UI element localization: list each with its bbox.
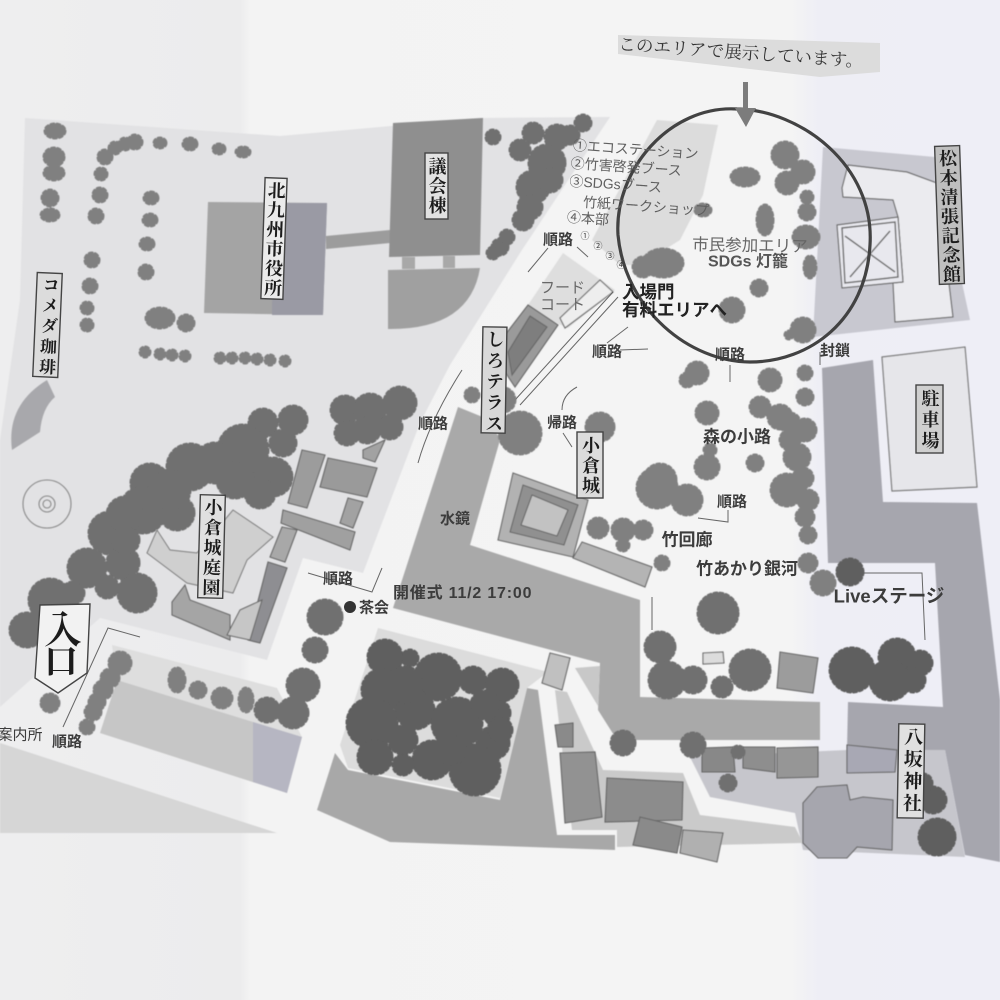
map text labels: SDGs 灯籠 [708, 252, 788, 270]
map text labels: 順路 [323, 570, 353, 588]
central trees [465, 362, 835, 595]
shrine dark ground [847, 702, 950, 750]
booth list: 竹紙ワークショップ [583, 194, 709, 219]
assembly side trees [486, 115, 591, 259]
map text labels: 有料エリアへ [622, 300, 727, 320]
buildings [172, 280, 897, 862]
garden forest [10, 387, 416, 647]
ground right of list [592, 120, 718, 265]
assembly podium [388, 268, 480, 329]
map text labels: 竹あかり銀河 [696, 560, 798, 578]
map text labels: 入場門 [622, 282, 674, 302]
map text labels: コート [540, 296, 585, 314]
map text labels: 順路 [52, 732, 82, 750]
top left trees [41, 124, 290, 366]
food court ground [528, 253, 615, 328]
map text labels: 封鎖 [820, 342, 850, 360]
upper left ground [0, 117, 610, 707]
lane buildings [555, 723, 573, 747]
food court strip [560, 280, 613, 328]
booth list: ②竹害啓発ブース [570, 155, 682, 179]
forest lot [340, 628, 548, 798]
top caption text: このエリアで展示しています。 [618, 34, 864, 71]
lower lane ground [555, 690, 803, 847]
label: Yasaka Shrine: 八坂神社 [900, 727, 923, 815]
assembly building [389, 118, 483, 257]
shrine buildings [847, 745, 897, 773]
map text labels [0, 230, 944, 750]
entrance lot [112, 645, 302, 737]
map text labels: 市民参加エリア [692, 235, 808, 256]
shiro terrace building [505, 305, 558, 387]
right side ground [822, 360, 1000, 862]
label: Komeda Coffee: コメダ珈琲 [36, 276, 60, 379]
booth list [566, 137, 713, 235]
komeda terrace [11, 380, 55, 450]
map text labels: 水鏡 [440, 510, 470, 528]
numbered route markers: ③ [605, 251, 615, 261]
castle corridor [573, 542, 652, 587]
map text labels: 茶会 [359, 600, 389, 616]
bottom left block [0, 743, 277, 833]
lower left block tinted end [253, 722, 302, 793]
museum square [837, 217, 903, 288]
museum inner square [842, 222, 898, 283]
kokura castle [498, 473, 588, 557]
label: Kokura Castle: 小倉城 [580, 436, 600, 496]
label: Kokura Castle Garden: 小倉城庭園 [200, 498, 223, 598]
water mirror plaza ground [393, 407, 820, 740]
numbered route markers [580, 231, 626, 270]
map text labels: Liveステージ [834, 586, 944, 606]
lower forest [347, 640, 518, 795]
stage trees [830, 559, 955, 855]
assembly links [402, 256, 455, 269]
map text labels: 順路 [418, 414, 448, 432]
booth list: ①エコステーション [572, 137, 699, 162]
circle highlighting exhibit area [618, 109, 870, 362]
booth list: ④本部 [566, 209, 609, 228]
map text labels: 竹回廊 [662, 530, 712, 550]
arrow to the circle [735, 82, 756, 127]
map text labels: 順路 [592, 342, 622, 360]
top caption band [618, 35, 880, 77]
entrance sign: 口 [44, 644, 78, 682]
shrine light ground [690, 750, 965, 857]
garden buildings [288, 450, 325, 508]
plaza trees [611, 593, 770, 791]
map text labels: フード [540, 280, 585, 296]
tea house trees [255, 600, 342, 728]
museum path [842, 165, 953, 322]
map text labels: 森の小路 [703, 428, 771, 446]
label: Matsumoto Seicho Memorial Museum: 松本清張記念館 [937, 149, 961, 284]
ground beside gate [575, 666, 600, 706]
route lines and small arrows [63, 247, 925, 727]
map base areas [0, 117, 1000, 862]
numbered route markers: ④ [616, 260, 626, 270]
map text labels: 順路 [717, 492, 747, 510]
city hall [204, 202, 327, 315]
label: Shiro Terrace: しろテラス [483, 330, 505, 435]
fountain [23, 480, 71, 528]
circled area trees [633, 142, 819, 342]
city hall tinted side [272, 203, 327, 315]
label: assembly building: 議会棟 [426, 156, 446, 216]
booth list: ③SDGsブース [569, 173, 662, 195]
entrance sign [35, 604, 90, 693]
entrance sign: 入 [44, 610, 82, 652]
connector [326, 230, 390, 249]
label: Kokura Castle [577, 432, 603, 498]
lower left block [100, 680, 302, 793]
lower center ground [317, 688, 615, 850]
gate [542, 653, 570, 690]
city hall buildings [11, 118, 483, 593]
stage side buildings [777, 652, 818, 693]
label: parking [916, 385, 943, 453]
map text labels: 順路 [543, 230, 573, 248]
garden pond [147, 510, 273, 593]
numbered route markers: ② [593, 241, 603, 251]
shiro terrace inner roof [508, 316, 547, 375]
trees [10, 115, 955, 855]
map text labels: 開催式 11/2 17:00 [393, 584, 532, 602]
numbered route markers: ① [580, 231, 590, 241]
memorial museum ground [813, 147, 970, 337]
map text labels: 帰路 [547, 414, 577, 432]
parking lot [882, 347, 977, 491]
label: Kitakyushu City Hall: 北九州市役所 [262, 181, 286, 298]
entrance road trees [41, 652, 253, 734]
label: parking: 駐車場 [920, 389, 940, 452]
map text labels: 順路 [715, 346, 745, 364]
